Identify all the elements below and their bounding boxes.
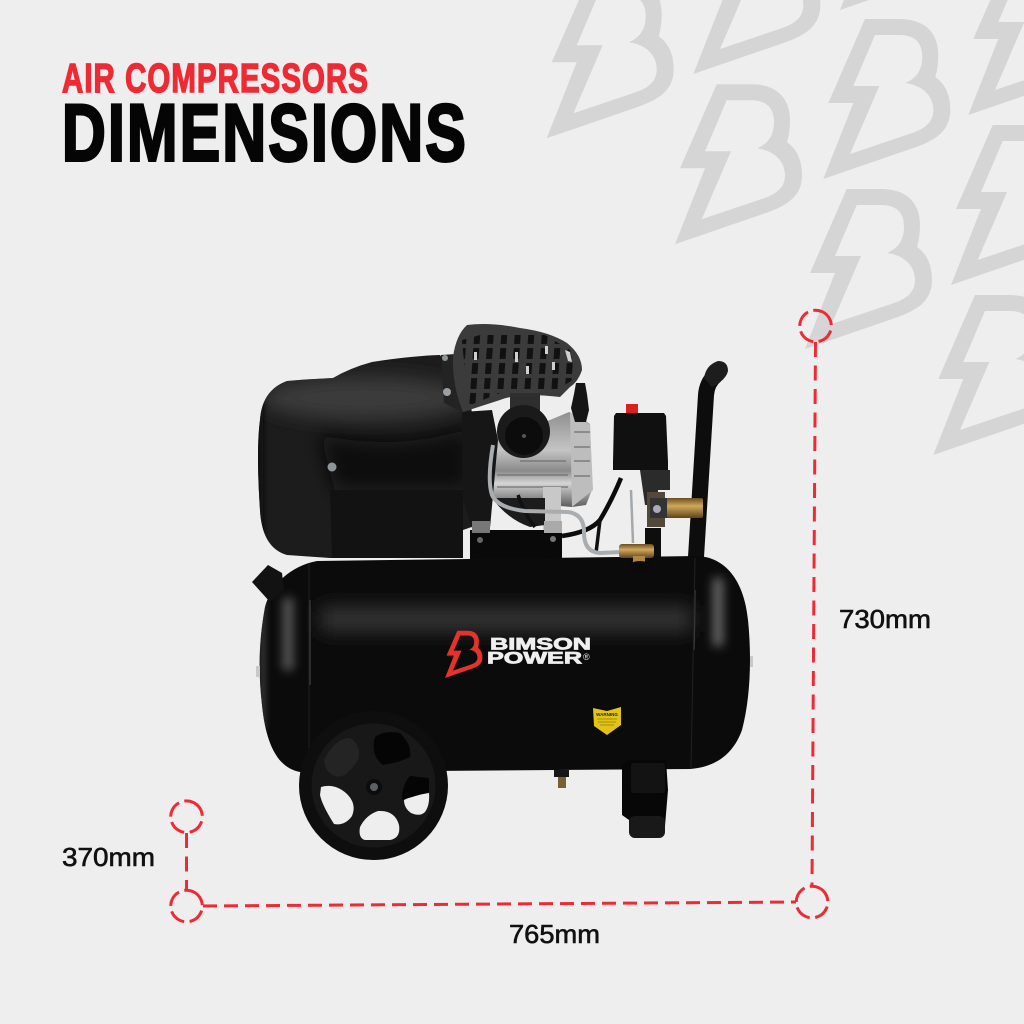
fan grill xyxy=(453,324,582,412)
width dimension: 765mm xyxy=(203,902,796,906)
watermark: Bimson lightning B pattern xyxy=(547,0,1024,455)
rubber foot xyxy=(622,760,668,838)
air tank xyxy=(256,556,753,772)
wheel openings xyxy=(320,786,354,824)
brand logo xyxy=(445,631,591,678)
title xyxy=(62,55,468,178)
mounting bracket xyxy=(470,521,562,572)
handle xyxy=(696,361,728,557)
valve manifold xyxy=(640,470,703,558)
shroud brackets and bolts xyxy=(328,354,476,472)
warning label: WARNING xyxy=(596,712,618,717)
shroud lower panel xyxy=(330,500,463,558)
wheel xyxy=(299,711,448,860)
drain valve xyxy=(554,770,569,788)
dimension lines xyxy=(166,305,836,927)
brand logo: ® xyxy=(583,652,590,662)
heading: air compressors: AIR COMPRESSORS xyxy=(62,55,369,101)
base corner marker xyxy=(791,881,833,923)
depth dimension: 370mm xyxy=(166,796,207,927)
logo mark xyxy=(445,631,482,678)
heading: dimensions: DIMENSIONS xyxy=(62,88,468,178)
warning label xyxy=(593,707,621,735)
copper air line xyxy=(631,490,633,543)
motor end cap xyxy=(497,393,550,458)
brand logo: POWER xyxy=(487,648,582,668)
label: 730mm: 730mm xyxy=(839,604,931,634)
height dimension: 730mm xyxy=(795,305,836,886)
tank-top brass fitting xyxy=(619,544,654,573)
pressure switch xyxy=(613,404,668,470)
air filter bellows xyxy=(571,383,589,422)
label: 765mm: 765mm xyxy=(509,919,600,949)
label: 370mm: 370mm xyxy=(62,842,155,872)
oil cap xyxy=(252,565,284,602)
wiring xyxy=(562,478,621,536)
air compressor product illustration xyxy=(252,324,753,860)
brand name: BIMSON xyxy=(490,634,591,654)
motor xyxy=(490,412,593,530)
wheel hub xyxy=(366,779,382,795)
fan shroud xyxy=(255,355,483,558)
shroud to motor housing xyxy=(462,410,498,528)
